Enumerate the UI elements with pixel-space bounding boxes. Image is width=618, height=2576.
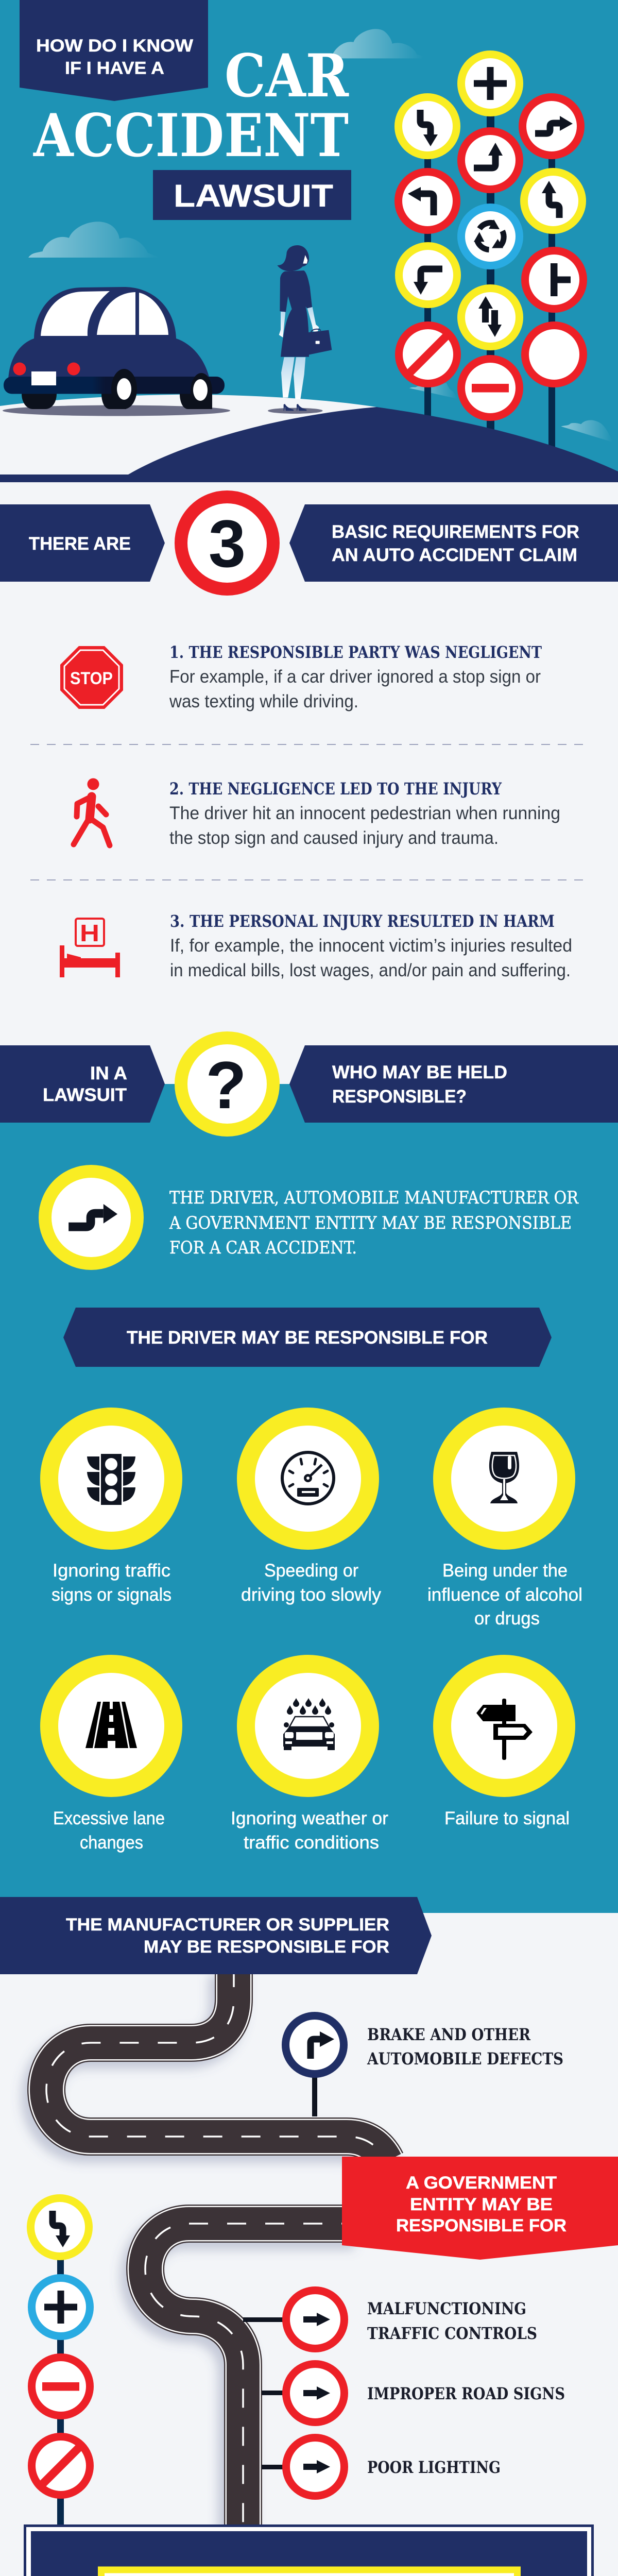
sign: squiggle down small [31, 2198, 89, 2257]
cloud behind signs [409, 383, 457, 399]
icon: hospital bed [60, 919, 120, 977]
panel: recovering damages [24, 2524, 594, 2576]
requirement 1 text: For example, if a car driver ignored a stop sign or [169, 667, 541, 687]
hero bottom band [0, 474, 618, 482]
title: car accident: ACCIDENT [33, 101, 349, 170]
text: malfunctioning controls [367, 2299, 537, 2343]
item: traffic signals [49, 1417, 173, 1605]
ribbon: basic requirements: AN AUTO ACCIDENT CLAIM [332, 545, 577, 565]
sign poles [424, 83, 555, 451]
sign: minus red [32, 2358, 90, 2415]
requirement 1 text: 1. THE RESPONSIBLE PARTY WAS NEGLIGENT [169, 642, 542, 662]
ribbon: government entity: A GOVERNMENT [406, 2173, 557, 2193]
sign: no entry diagonal [399, 326, 457, 383]
hero panel [0, 0, 618, 482]
text: malfunctioning controls: MALFUNCTIONING [367, 2299, 526, 2318]
text: who may be responsible [169, 1188, 579, 1258]
sign: plus [461, 55, 519, 112]
ribbon: there are: THERE ARE [29, 534, 131, 554]
title: car accident [33, 41, 349, 170]
item: failure to signal: Failure to signal [444, 1808, 570, 1828]
item: failure to signal [442, 1664, 570, 1828]
item: weather: Ignoring weather or [231, 1808, 388, 1828]
sign: improper road signs [262, 2364, 344, 2422]
requirement 3 text: 3. THE PERSONAL INJURY RESULTED IN HARM [170, 911, 555, 931]
requirement 2 text: The driver hit an innocent pedestrian when running [169, 803, 560, 823]
ribbon: manufacturer or supplier: MAY BE RESPONSIBLE FOR [144, 1937, 389, 1957]
requirement 2 text [169, 779, 560, 848]
ribbon: manufacturer or supplier: THE MANUFACTURER OR SUPPLIER [66, 1915, 389, 1935]
item: lane changes [49, 1664, 173, 1853]
icon: wine glass [489, 1452, 519, 1503]
item: alcohol or drugs: or drugs [474, 1608, 540, 1629]
ribbon: in a lawsuit: LAWSUIT [43, 1085, 127, 1105]
item: lane changes: Excessive lane [53, 1808, 165, 1828]
ribbon: government entity: RESPONSIBLE FOR [396, 2216, 566, 2235]
cloud top [331, 29, 424, 58]
item: speeding [241, 1417, 382, 1605]
text: who may be responsible: A GOVERNMENT ENTITY MAY BE RESPONSIBLE [169, 1213, 572, 1233]
icon: traffic light [87, 1454, 135, 1505]
banner: how do i know [20, 0, 208, 101]
sign: no entry [32, 2437, 90, 2495]
sign: malfunctioning controls [243, 2291, 344, 2348]
sign: t junction [525, 250, 583, 309]
section: three requirements [0, 497, 618, 980]
sign: squiggle up [524, 172, 582, 230]
ribbon: government entity [342, 2157, 618, 2260]
text: improper road signs: IMPROPER ROAD SIGNS [367, 2384, 565, 2403]
ribbon: government entity: ENTITY MAY BE [410, 2195, 553, 2214]
road: upper winding [40, 1968, 386, 2168]
item: traffic signals: signs or signals [52, 1585, 171, 1605]
title box: lawsuit: LAWSUIT [174, 178, 333, 213]
sign: question mark [181, 1038, 273, 1130]
text: brake defects: AUTOMOBILE DEFECTS [367, 2049, 563, 2069]
text: brake defects: BRAKE AND OTHER [367, 2025, 530, 2044]
ribbon: in a lawsuit: IN A [90, 1063, 127, 1083]
text: poor lighting: POOR LIGHTING [367, 2458, 501, 2477]
icon: speedometer [282, 1452, 334, 1504]
sign: minus [461, 359, 519, 417]
road white [0, 395, 376, 474]
sign: plus blue [32, 2278, 90, 2336]
sign: number 3 [181, 497, 273, 589]
ribbon: the driver [63, 1308, 552, 1367]
requirement 3 text [170, 911, 572, 980]
sign: blank [525, 326, 583, 383]
hill navy [128, 407, 618, 474]
ribbon: there are [0, 504, 165, 582]
icon: pedestrian [74, 778, 110, 845]
cloud left [28, 222, 160, 258]
item: traffic signals: Ignoring traffic [53, 1561, 170, 1581]
sign: turn up [461, 131, 519, 190]
sign: poor lighting [262, 2438, 344, 2496]
sign: squiggle arrow [45, 1172, 137, 1263]
requirement 2 text: 2. THE NEGLIGENCE LED TO THE INJURY [169, 779, 502, 799]
item: alcohol or drugs [427, 1417, 582, 1629]
sign: number 3: 3 [209, 506, 246, 581]
item: weather [231, 1664, 388, 1853]
item: alcohol or drugs: influence of alcohol [427, 1585, 582, 1605]
banner: how do i know: IF I HAVE A [65, 59, 164, 78]
requirement 3 text: in medical bills, lost wages, and/or pain and suffering. [170, 960, 571, 980]
title: car accident: CAR [225, 41, 349, 110]
sign: squiggle down [399, 97, 456, 156]
item: lane changes: changes [80, 1833, 143, 1853]
ribbon: who may be held responsible [289, 1045, 618, 1123]
sign: turn down [399, 246, 457, 304]
sign column left [31, 2198, 90, 2529]
sign: two way [461, 289, 519, 346]
sign: turn left [399, 172, 456, 230]
car [3, 287, 230, 416]
text: brake defects [367, 2025, 563, 2069]
icon: car in rain [283, 1698, 335, 1750]
item: speeding: Speeding or [264, 1561, 358, 1581]
ribbon: the driver: THE DRIVER MAY BE RESPONSIBLE FOR [127, 1328, 488, 1348]
icon: signpost [476, 1699, 533, 1760]
ribbon: basic requirements [289, 504, 618, 582]
text: who may be responsible: FOR A CAR ACCIDENT. [169, 1238, 357, 1258]
requirement 1 text: was texting while driving. [169, 691, 358, 711]
ribbon: manufacturer or supplier [0, 1897, 432, 1974]
ribbon: basic requirements: BASIC REQUIREMENTS FOR [332, 522, 579, 542]
road: lower winding [139, 2224, 360, 2534]
sign: roundabout [461, 207, 519, 266]
requirement 3 text: If, for example, the innocent victim’s injuries resulted [170, 936, 572, 956]
ribbon: who may be held responsible: RESPONSIBLE? [332, 1087, 467, 1107]
icon: road [85, 1702, 137, 1748]
item: alcohol or drugs: Being under the [442, 1561, 568, 1581]
banner: how do i know: HOW DO I KNOW [36, 36, 194, 56]
woman with briefcase [268, 245, 332, 414]
sign: question mark: ? [205, 1047, 247, 1123]
requirement 1 text [169, 642, 542, 711]
sign: brake defects [285, 2015, 344, 2116]
item: speeding: driving too slowly [241, 1585, 382, 1605]
text: malfunctioning controls: TRAFFIC CONTROLS [367, 2324, 537, 2343]
icon: stop sign [60, 646, 123, 709]
sign: squiggle right [522, 97, 581, 156]
cloud lower right [561, 420, 613, 442]
item: weather: traffic conditions [244, 1833, 379, 1853]
callout: question box [101, 2570, 517, 2576]
ribbon: who may be held responsible: WHO MAY BE HELD [332, 1062, 507, 1082]
icon: hospital bed: H [80, 920, 99, 946]
section: who may be responsible [0, 1038, 618, 1913]
requirement 2 text: the stop sign and caused injury and trauma. [169, 828, 499, 848]
title box: lawsuit [153, 170, 351, 220]
icon: stop sign: STOP [70, 669, 113, 688]
ribbon: in a lawsuit [0, 1045, 165, 1123]
text: who may be responsible: THE DRIVER, AUTOMOBILE MANUFACTURER OR [169, 1188, 579, 1208]
